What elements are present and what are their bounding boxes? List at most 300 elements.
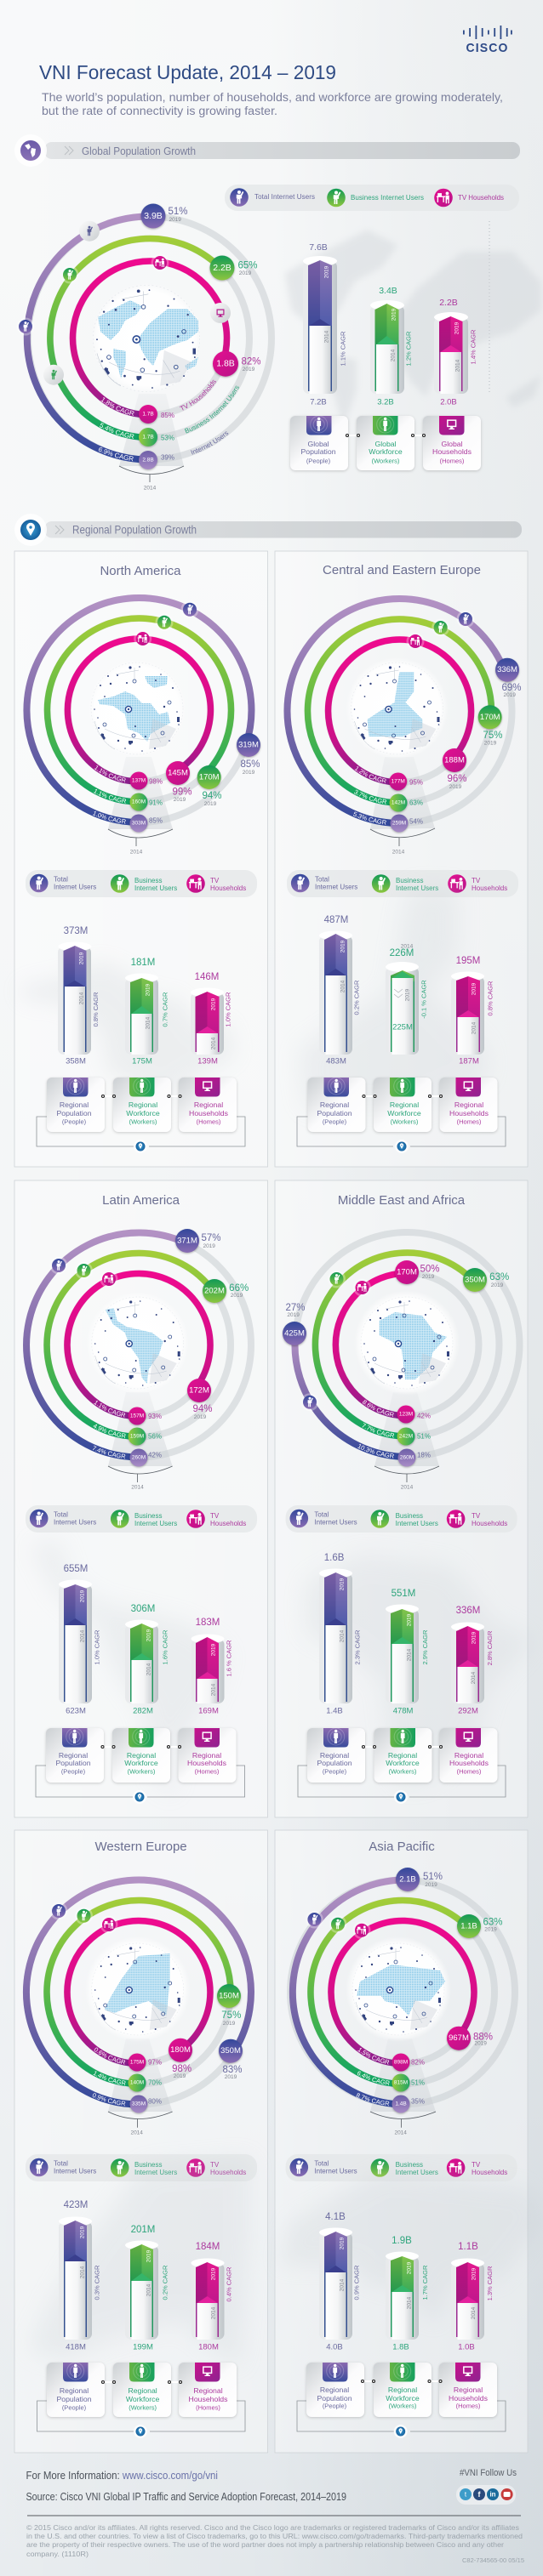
legend: Internet Users (396, 1520, 438, 1527)
ring chart: 2014 (392, 849, 405, 856)
ring chart: 5.3% CAGR (353, 811, 386, 825)
2014 bracket (119, 466, 184, 492)
ring chart: 51% (411, 2078, 425, 2087)
ring chart: 0.9% CAGR (92, 2093, 126, 2106)
bar: workforce (125, 958, 169, 1066)
panel: Central and Eastern Europe (274, 551, 528, 1167)
bar: workforce (125, 1604, 169, 1716)
bar: population: 623M (66, 1706, 86, 1716)
cards: Households (187, 1759, 227, 1767)
arc: TV households (73, 261, 227, 415)
legal text (26, 2523, 523, 2558)
subtitle (42, 90, 503, 117)
bar: workforce: 181M (131, 958, 155, 968)
ring chart: 260M (400, 1454, 414, 1461)
bar: global workforce: 3.2B (377, 398, 394, 407)
ring chart: 82% (411, 2058, 425, 2067)
legend: Internet Users (314, 1519, 357, 1526)
bar: workforce (386, 1589, 429, 1716)
ring chart: 42% (417, 1412, 431, 1420)
2019 values: 2019 (243, 367, 255, 372)
world map backdrop (285, 221, 541, 429)
ring chart: 3.7% CAGR (354, 789, 386, 805)
ring chart: 35% (411, 2097, 425, 2106)
cards: Regional (320, 2386, 349, 2394)
cards: Households (449, 1109, 489, 1117)
bar: population: 4.0B (326, 2342, 343, 2352)
bar: population (59, 2200, 100, 2352)
bar: population: 487M (324, 915, 348, 925)
bar: population: 0.9% CAGR (352, 2265, 361, 2300)
legend: Internet Users (134, 884, 177, 892)
bar: households: 2014 (471, 1671, 477, 1684)
ring chart: 10.3% CAGR (357, 1444, 394, 1459)
legend (26, 870, 257, 897)
ring chart: 371M (177, 1237, 197, 1245)
bar: workforce (386, 2236, 429, 2352)
ring chart: 75% (221, 2010, 241, 2021)
bar: workforce: 2019 (407, 1613, 412, 1626)
legend: TV (210, 1512, 220, 1520)
legal text: © 2015 Cisco and/or its affiliates. All rights reserved. Cisco and the Cisco logo are trademarks or registered trademarks of Cisco and/or its affiliates (26, 2523, 519, 2532)
cards: (Homes) (457, 1117, 482, 1126)
legend (287, 870, 518, 897)
bar: population: 4.1B (325, 2212, 346, 2222)
ring chart: 51% (423, 1872, 443, 1882)
legal text: are the property of their respective owners. The use of the word partner does not imply a partnership relationship between Cisco and any other (26, 2540, 504, 2549)
cards (36, 1728, 245, 1804)
track labels: Internet Users (191, 432, 228, 455)
2019 values: 3.9B (144, 211, 163, 221)
ring chart: 83% (222, 2065, 243, 2075)
ring chart: 2019 (174, 797, 186, 803)
ring chart: 242M (399, 1434, 413, 1439)
ring chart: 88% (473, 2033, 493, 2043)
bar: workforce: 0.2% CAGR (162, 2265, 169, 2300)
2019 values: 2019 (169, 217, 181, 223)
2014 values: 2.8B (142, 458, 154, 463)
bar: population: 2019 (339, 2237, 346, 2249)
legend (286, 2154, 517, 2181)
ring chart: 1.4% CAGR (93, 2072, 126, 2085)
legend: Households (210, 1520, 246, 1527)
ring chart: 2019 (474, 2041, 487, 2046)
cards: global: Population (300, 447, 336, 456)
ring chart: 0.6% CAGR (94, 2048, 126, 2065)
bar: workforce: 201M (131, 2225, 155, 2235)
cards: Workforce (387, 1109, 421, 1117)
ring chart (22, 1876, 254, 2136)
ring chart (23, 594, 262, 856)
ring chart: 93% (148, 1413, 162, 1420)
bar: households (191, 972, 231, 1066)
cards: Regional (60, 1100, 89, 1109)
cards: Regional (194, 1100, 223, 1109)
panel title: Middle East and Africa (338, 1193, 466, 1208)
bar: population (319, 2212, 361, 2352)
footer: follow us: #VNI Follow Us (460, 2468, 517, 2478)
panel title: North America (100, 564, 181, 578)
legend: Business (396, 877, 423, 884)
bar: workforce: 2019 (145, 983, 151, 996)
legend: Households (472, 884, 507, 892)
ring chart: 2019 (503, 692, 516, 698)
cards: Households (449, 1759, 489, 1767)
subtitle: The world’s population, number of households, and workforce are growing moderately, (42, 90, 503, 104)
bar: households: 2019 (472, 2267, 477, 2280)
legend: Households (472, 1520, 507, 1527)
ring chart: 175M (130, 2060, 144, 2065)
bar: population: 483M (326, 1056, 346, 1066)
ring chart: 2019 (491, 1282, 504, 1288)
cards (37, 2363, 245, 2438)
bar: population: 1.0% CAGR (94, 1629, 100, 1664)
legend: Internet Users (134, 2169, 177, 2176)
bar: population (319, 915, 361, 1066)
ring chart: 188M (444, 755, 465, 765)
bar: global households: 2.0B (440, 398, 457, 407)
bar: workforce: 226M (390, 948, 414, 958)
ring chart: 2019 (194, 1414, 207, 1420)
bar: population (319, 1553, 361, 1716)
ring chart: 75% (483, 731, 503, 741)
ring chart: 967M (449, 2033, 469, 2043)
bar: households: 2014 (211, 1037, 216, 1049)
ring chart: 425M (284, 1328, 305, 1339)
title: VNI Forecast Update, 2014 – 2019 (39, 61, 336, 83)
cards: Regional (60, 2386, 89, 2395)
cards: global: Global (374, 440, 397, 448)
ring chart: 4.9% CAGR (94, 1424, 126, 1439)
ring chart: 85% (240, 759, 260, 770)
ring chart: 94% (202, 791, 222, 801)
cards: Regional (388, 2386, 417, 2394)
legend: TV (210, 2161, 220, 2169)
cards: Regional (193, 2386, 223, 2395)
cards: Regional (454, 1751, 483, 1760)
bar: workforce: 2014 (407, 1648, 412, 1661)
bar: households: 1.1B (458, 2242, 478, 2252)
bar: population: 418M (66, 2342, 86, 2352)
ring chart: 98% (149, 777, 163, 786)
bar: population: 2014 (78, 992, 85, 1004)
cards: (Homes) (456, 2402, 481, 2410)
CAGR labels: 5.4% CAGR (100, 423, 134, 439)
cards: Regional (128, 2386, 157, 2395)
legal text: company. (1110R) (26, 2550, 89, 2558)
bar: population: 2014 (80, 2266, 85, 2278)
ring chart: 159M (130, 1434, 144, 1439)
ring chart: 170M (397, 1267, 417, 1277)
logo: Cisco: CISCO (466, 41, 509, 55)
ring chart: 91% (149, 799, 163, 806)
bar: population: 2014 (339, 2278, 346, 2291)
section bar: Regional Population Growth: Regional Population Growth (72, 522, 197, 536)
ring chart: global (19, 203, 275, 492)
bar: workforce: 1.9B (392, 2236, 412, 2246)
ring chart: 54% (409, 818, 423, 825)
bar: workforce: 2.9% CAGR (421, 1629, 429, 1664)
bar: households (451, 1606, 494, 1716)
CAGR labels (99, 398, 134, 461)
cards: (Workers) (389, 1767, 417, 1776)
legend: Total (315, 876, 329, 883)
bar: households: 0.4% CAGR (225, 2266, 233, 2301)
bar: households: 1.0B (458, 2342, 475, 2352)
legend: global (225, 185, 519, 211)
legend: global: Total Internet Users (254, 193, 315, 201)
bar: workforce: 2014 (145, 1016, 151, 1029)
ring chart (287, 1868, 518, 2136)
ring chart: 2019 (484, 740, 497, 747)
bar: households: 2019 (211, 1643, 216, 1656)
2014 values (139, 405, 174, 469)
2019 values: 2019 (239, 270, 252, 276)
legend: Households (472, 2169, 507, 2176)
ring chart: 7.4% CAGR (93, 1446, 126, 1459)
ring chart: 2014 (401, 1485, 414, 1490)
ring chart (284, 595, 522, 856)
ring chart: 150M (219, 1992, 239, 2000)
social icons: in (489, 2490, 496, 2499)
cards: Regional (127, 1751, 156, 1760)
ring chart: 815M (394, 2080, 408, 2085)
section bar: Global Population Growth: Global Population Growth (82, 145, 196, 157)
bar: households (191, 2242, 233, 2352)
cards (297, 2363, 506, 2438)
ring chart: 170M (480, 713, 500, 722)
panel: North America (14, 551, 268, 1167)
ring chart: 123M (399, 1412, 413, 1417)
cards: Population (56, 2395, 92, 2403)
ring chart: 319M (238, 740, 259, 750)
cards: (Workers) (128, 1767, 156, 1776)
cards: global: (Workers) (372, 458, 400, 464)
legend: global: Business Internet Users (351, 194, 424, 202)
ring chart: 157M (130, 1413, 144, 1419)
bar: households: 0.8% CAGR (487, 981, 494, 1015)
arc: business internet users (50, 239, 221, 438)
bar: global population: 7.6B (309, 242, 328, 253)
legend: TV (472, 1512, 481, 1520)
ring chart: 177M (392, 779, 405, 784)
ring chart: 2014 (394, 2130, 407, 2136)
ring chart: 145M (168, 769, 188, 777)
bar: population: 2019 (80, 2226, 85, 2238)
cards: global: Global (441, 440, 463, 448)
legend (26, 1505, 257, 1533)
bar: workforce: 2014 (407, 2296, 412, 2309)
bar: global population: 2019 (323, 265, 330, 278)
bar: households: 2014 (211, 1683, 216, 1696)
legal text: in the U.S. and other countries. To view a list of Cisco trademarks, go to this URL: www.cisco.com/go/trademarks. Third-party trademarks mentioned (26, 2532, 523, 2540)
legend: Business (134, 1512, 162, 1520)
bar: global population: 7.2B (310, 398, 327, 407)
ring chart: 94% (192, 1404, 213, 1414)
ring chart: 2019 (225, 2074, 237, 2080)
bar: workforce: 225M (392, 1022, 413, 1032)
cards: (Homes) (197, 1117, 221, 1126)
CAGR labels: 1.8% CAGR (100, 398, 134, 416)
map backdrop (306, 1555, 536, 1783)
bar: population: 2019 (339, 1578, 346, 1590)
ring chart: 98% (172, 2064, 191, 2074)
2014 values: 1.7B (142, 412, 154, 417)
bar: population: 1.4B (326, 1706, 343, 1716)
track labels: Business Internet Users (185, 386, 239, 434)
legend: Internet Users (315, 883, 357, 891)
ring chart: 8.6% CAGR (363, 1400, 394, 1417)
cards: (People) (323, 2402, 347, 2410)
cards: Regional (390, 1100, 419, 1109)
bar: households: 1.3% CAGR (486, 2266, 494, 2300)
bar: households: 1.0% CAGR (225, 992, 231, 1026)
ring chart: 2019 (449, 784, 462, 790)
ring chart (23, 1228, 254, 1490)
legend: Households (210, 884, 246, 892)
bar: workforce: 306M (131, 1604, 155, 1614)
cards: Regional (320, 1751, 349, 1760)
legend: TV (472, 877, 481, 884)
legend: Business (134, 2161, 162, 2169)
cards: (Workers) (389, 2402, 417, 2410)
bar: workforce: -0.1 % CAGR (420, 980, 427, 1019)
bar: population: 2.3% CAGR (354, 1629, 361, 1664)
panel title: Latin America (102, 1193, 180, 1208)
ring chart: 85% (149, 816, 163, 825)
ring chart: 350M (220, 2046, 241, 2056)
ring chart: 259M (392, 820, 406, 827)
cards: Workforce (126, 1109, 160, 1117)
bar: population: 358M (66, 1056, 86, 1066)
legend: Total (314, 2160, 329, 2167)
panel title: Western Europe (95, 1840, 187, 1854)
social icons: t (465, 2490, 467, 2499)
cards (297, 1078, 506, 1153)
bar: households: 187M (459, 1056, 479, 1066)
globe (91, 283, 202, 394)
ring chart: 8.7% CAGR (356, 2093, 390, 2106)
ring chart: 1.1% CAGR (94, 765, 126, 782)
logo: Cisco (463, 26, 512, 55)
bar: workforce (386, 944, 427, 1055)
legend: Internet Users (54, 2167, 96, 2175)
ring chart: 6.4% CAGR (357, 2071, 390, 2085)
bar: workforce: 1.6% CAGR (162, 1629, 169, 1664)
bar: workforce: 0.7% CAGR (162, 992, 169, 1026)
ring chart: 2019 (174, 2073, 186, 2079)
bar: global households: 1.4% CAGR (470, 329, 477, 364)
bar: population: 0.8% CAGR (92, 992, 100, 1026)
ring chart: 56% (148, 1432, 162, 1441)
bar: households: 336M (456, 1606, 480, 1616)
ring chart: 2019 (231, 1293, 243, 1299)
cards (37, 1078, 245, 1153)
ring chart: 1.1% CAGR (94, 1401, 126, 1418)
legend: Internet Users (134, 1520, 177, 1527)
bar: population: 0.2% CAGR (352, 980, 361, 1015)
cards: (Workers) (391, 1117, 419, 1126)
legend: Total (54, 1510, 68, 1519)
legend: Business (396, 2161, 423, 2169)
bar: population: 2014 (340, 980, 346, 992)
cards: Regional (192, 1751, 221, 1760)
ring chart: 18% (417, 1451, 431, 1459)
legend: Internet Users (396, 2169, 438, 2176)
bar: households: 2019 (472, 982, 477, 995)
legend: Total (314, 1510, 329, 1519)
bar: workforce: 1.8B (392, 2342, 409, 2352)
bar: workforce: 282M (133, 1706, 153, 1716)
ring chart: 1.1B (460, 1922, 477, 1931)
cards: (Workers) (129, 1117, 157, 1126)
ring chart: 898M (394, 2060, 408, 2065)
bar: households: 2019 (211, 998, 216, 1010)
bar: global households: 2014 (454, 359, 461, 372)
legend: Internet Users (54, 1519, 96, 1526)
legend: Internet Users (314, 2167, 357, 2175)
bar: households: 195M (456, 956, 480, 966)
bar: households: 180M (198, 2342, 219, 2352)
bar: workforce: 2019 (146, 2249, 151, 2262)
2019 values: 1.8B (216, 359, 235, 369)
2019 values: 51% (168, 207, 188, 217)
ring chart: 350M (465, 1276, 485, 1284)
ring chart: 70% (148, 2078, 162, 2087)
legend: TV (472, 2161, 481, 2169)
2014 values: 85% (161, 412, 174, 419)
cards: (Workers) (129, 2403, 157, 2412)
legend (26, 2154, 257, 2181)
ring chart: 303M (132, 820, 146, 827)
cards: Population (317, 1109, 352, 1117)
legend: Internet Users (396, 884, 438, 892)
ring chart: 260M (132, 1454, 146, 1461)
bar: households: 2019 (472, 1631, 477, 1644)
ring chart: 63% (409, 799, 423, 806)
ring chart: 69% (501, 683, 522, 693)
bar: global population (303, 242, 347, 407)
ring chart: 160M (132, 799, 146, 805)
bar: population: 2014 (80, 1629, 85, 1642)
bar: households: 146M (195, 972, 219, 982)
ring chart: 57% (201, 1233, 221, 1243)
cards: global: (Homes) (440, 458, 465, 464)
bar: population: 2019 (78, 952, 85, 964)
cards: (People) (323, 1117, 347, 1126)
ring chart: 137M (132, 777, 146, 784)
cards (298, 1728, 506, 1804)
ring chart: 42% (148, 1451, 162, 1459)
cards: Workforce (126, 2395, 159, 2403)
cards: Regional (320, 1100, 349, 1109)
cards: Population (55, 1759, 91, 1767)
legend: TV (210, 877, 220, 884)
cards: Workforce (124, 1759, 158, 1767)
panel title: Central and Eastern Europe (323, 563, 481, 577)
bar: households: 184M (196, 2242, 220, 2252)
CAGR labels: 6.9% CAGR (99, 447, 134, 461)
map backdrop (31, 1540, 227, 1797)
cards: Workforce (386, 2394, 420, 2403)
panel title: Asia Pacific (369, 1840, 435, 1854)
ring chart: 1.0% CAGR (92, 811, 126, 824)
bar: global workforce: 2019 (392, 308, 397, 321)
bar: population (58, 926, 100, 1066)
legend: Total (54, 876, 68, 883)
cards: global: (People) (306, 458, 331, 464)
cards: Population (317, 2394, 352, 2403)
